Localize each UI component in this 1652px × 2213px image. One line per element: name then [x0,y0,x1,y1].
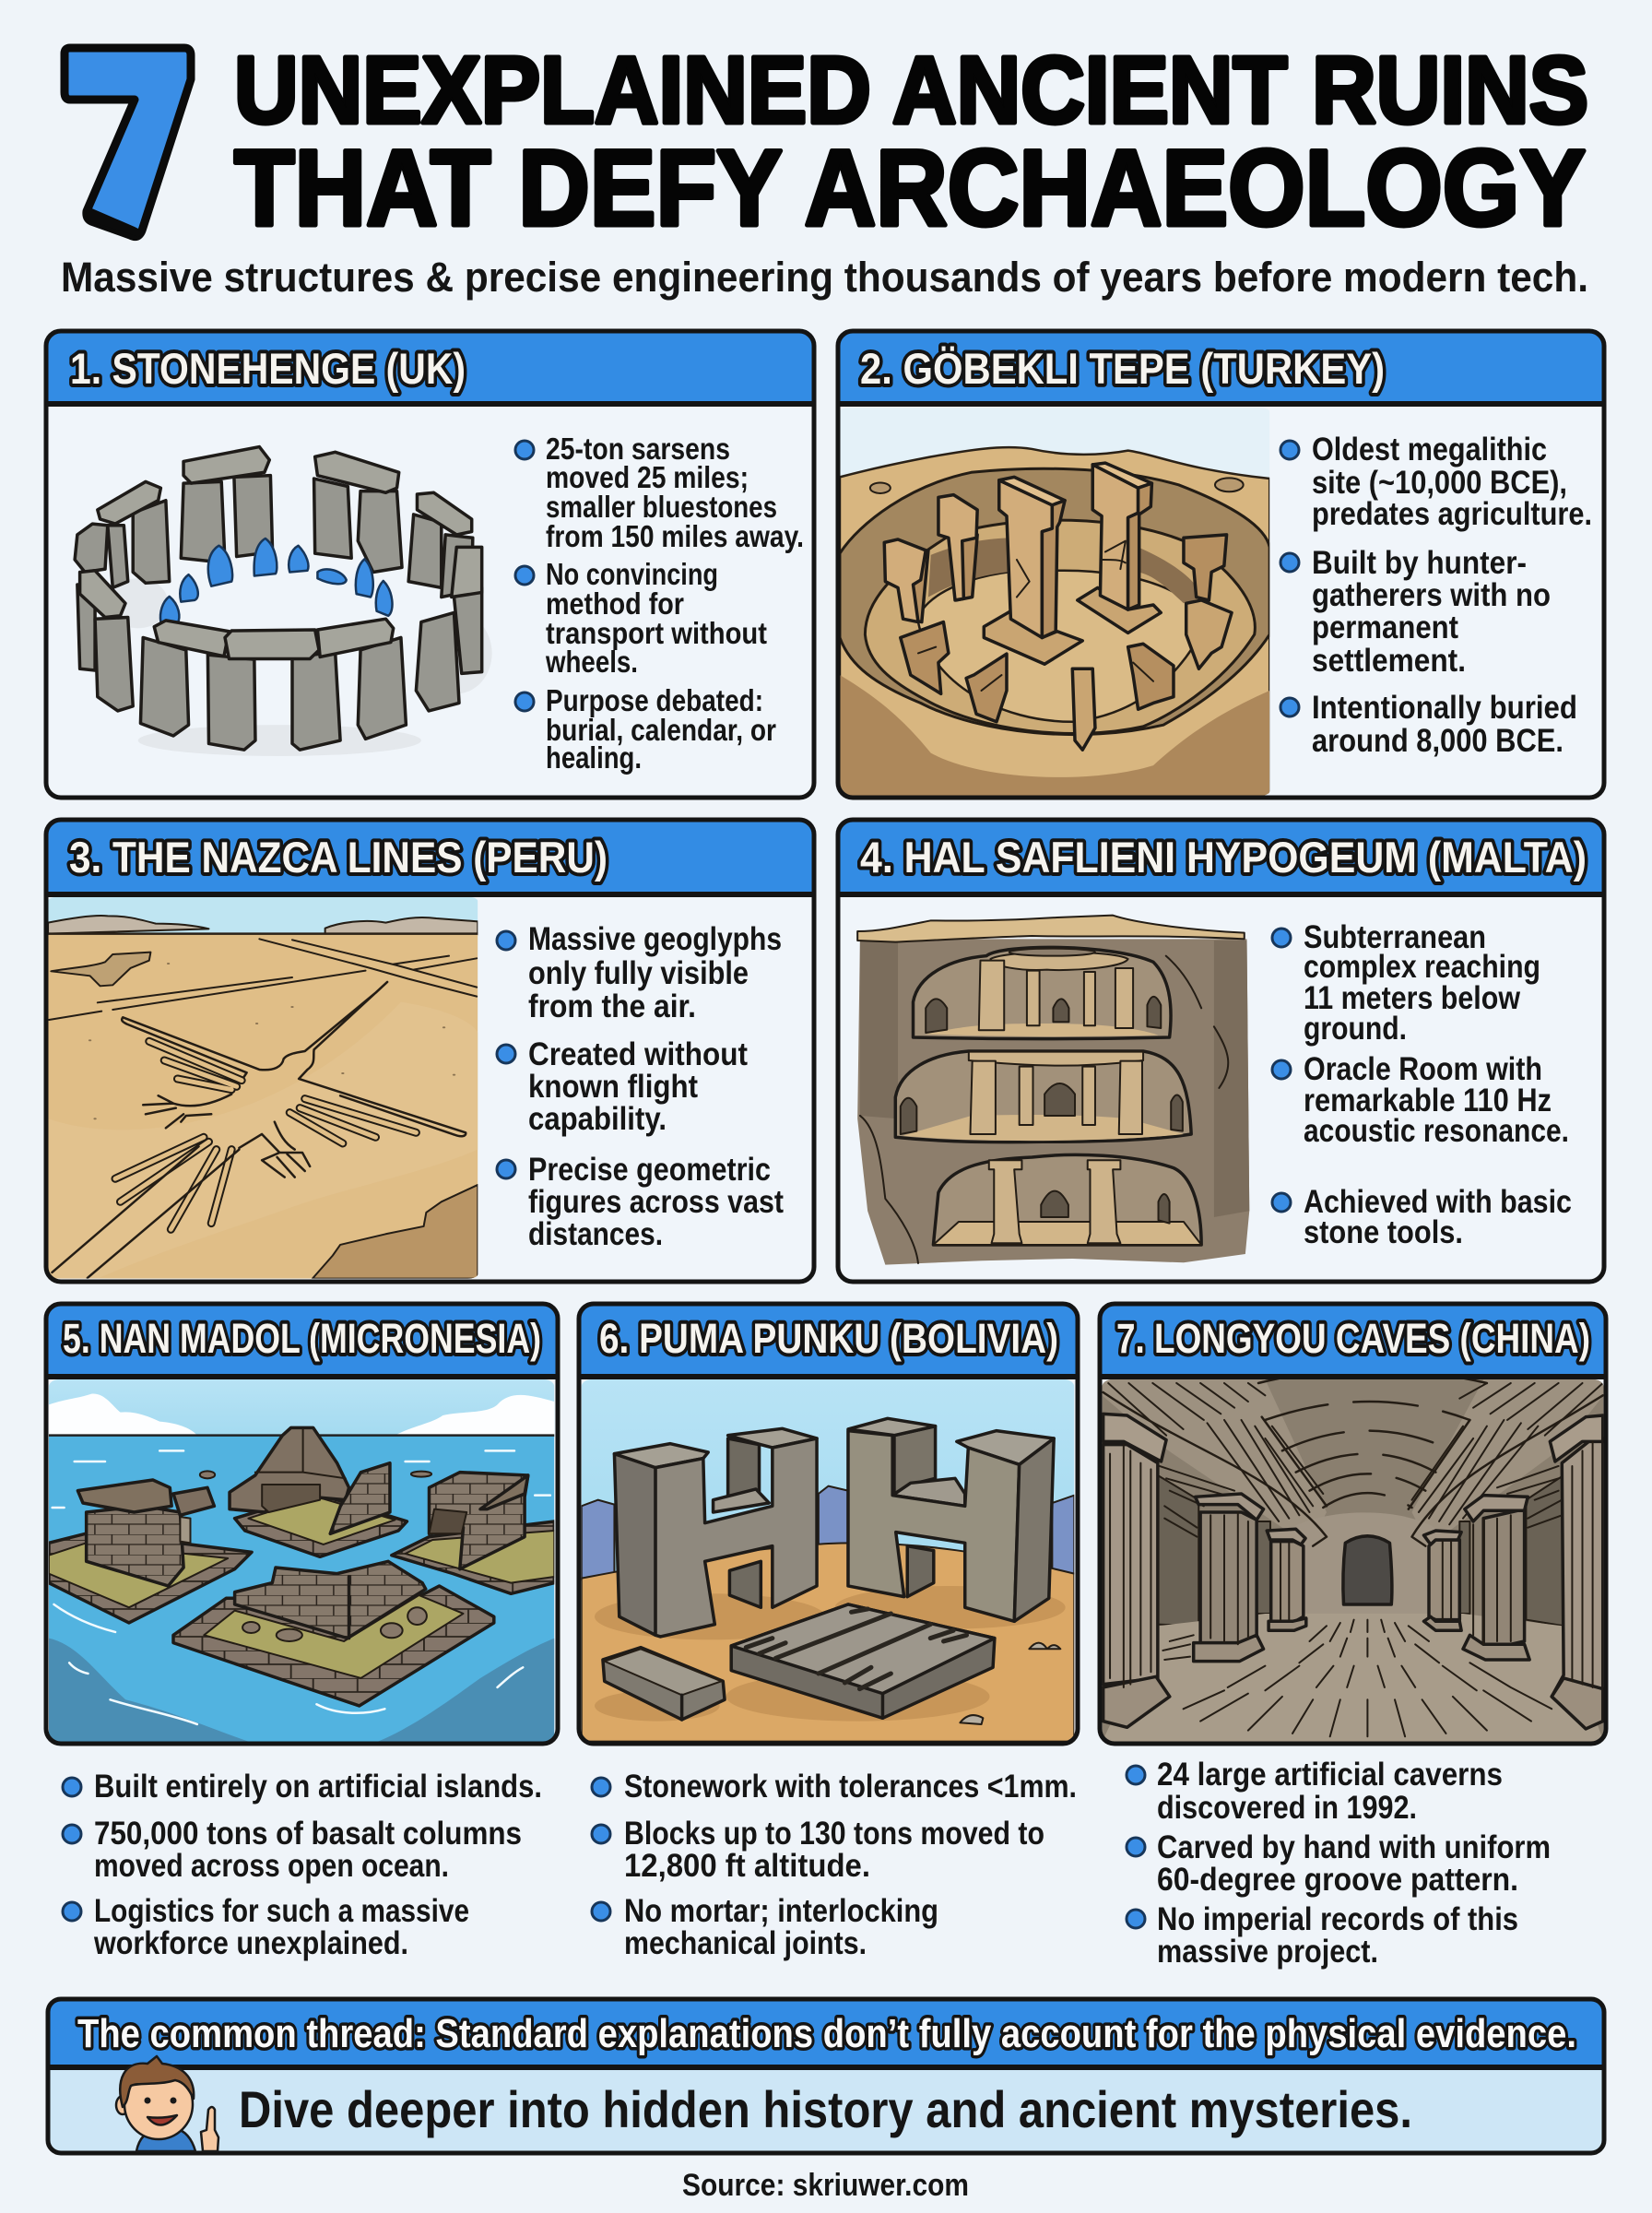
bullet: purpose: burial, calendar, or [546,713,776,747]
banner: common thread and call to action [46,1999,1606,2153]
bullet: sarsens [515,432,804,553]
bullet: sarsens: from 150 miles away. [546,519,804,553]
bullets [497,921,784,1252]
bullet: mortar: No mortar; interlocking [624,1893,938,1929]
bullet: oldest site: site (~10,000 BCE), [1312,465,1567,501]
header bar [836,331,1606,407]
bullet: sarsens: smaller bluestones [546,490,777,524]
bullet: records [1127,1901,1518,1970]
bullet: stone tools: Achieved with basic [1304,1184,1572,1220]
bullet: oracle room [1272,1051,1569,1149]
source credit: Source: skriuwer.com [682,2168,969,2203]
bullet: geoglyphs: from the air. [528,988,696,1024]
block 1 [614,1428,817,1637]
bullet: hunter-gatherers: permanent [1312,609,1458,645]
block 2 [848,1418,1054,1621]
bullet: logistics [63,1893,469,1961]
bullet: groove: Carved by hand with uniform [1157,1829,1551,1865]
illustration: Nan Madol island ruins [49,1379,554,1743]
bullet: logistics: workforce unexplained. [93,1925,408,1961]
header bar [44,1304,560,1379]
bullet: purpose [515,683,776,775]
panel: Puma Punku [577,1304,1080,1744]
header bar [577,1304,1080,1379]
call to action: Dive deeper into hidden history and ancient mysteries. [239,2080,1412,2138]
icon: big blue numeral 7 [65,48,191,237]
panel outline [46,1304,558,1744]
panel outline [46,331,814,798]
panel: Nan Madol [44,1304,560,1744]
bullets [1272,919,1572,1250]
left island [49,1533,252,1623]
bullet: logistics: Logistics for such a massive [94,1893,469,1929]
heading: 6. PUMA PUNKU (BOLIVIA) [599,1315,1058,1362]
panel outline [838,331,1604,798]
bullet: blocks: 12,800 ft altitude. [624,1848,870,1884]
bullet: basalt [63,1816,522,1884]
bullet: flight: capability. [528,1101,667,1137]
illustration: Puma Punku H-blocks [582,1379,1074,1742]
bullet: transport: No convincing [546,557,718,591]
bullet: transport: transport without [546,616,767,650]
bullet: subterranean: 11 meters below [1304,980,1521,1016]
illustration: Stonehenge stone circle [75,447,492,756]
bullet: mortar [592,1893,938,1961]
illustration: hypogeum cross-section [857,916,1249,1265]
bullet: hunter-gatherers: settlement. [1312,643,1466,679]
heading: 5. NAN MADOL (MICRONESIA) [63,1315,541,1362]
bullet: mortar: mechanical joints. [624,1925,867,1961]
panel: Longyou Caves [1098,1304,1608,1744]
bullet: stone tools [1272,1184,1572,1250]
bullet: oracle room: acoustic resonance. [1304,1113,1569,1149]
panel outline [46,820,814,1282]
bullet: hunter-gatherers: Built by hunter- [1312,545,1527,581]
bullet: subterranean: Subterranean [1304,919,1486,955]
bullet: buried: around 8,000 BCE. [1312,723,1564,759]
bullet: geometry: Precise geometric [528,1152,771,1188]
bullet: flight [497,1036,748,1137]
bullet: caverns: 24 large artificial caverns [1157,1757,1503,1793]
bullet: subterranean: complex reaching [1304,949,1540,985]
bullet: artificial islands: Built entirely on artificial islands. [94,1769,542,1805]
bullet: flight: known flight [528,1069,698,1105]
bullet: hunter-gatherers: gatherers with no [1312,577,1551,613]
bullets [515,432,804,775]
bullet: hunter-gatherers [1280,545,1551,679]
panel: Stonehenge [44,331,816,798]
bullet: tolerances: Stonework with tolerances <1mm. [624,1769,1077,1805]
bullet: purpose: healing. [546,740,642,775]
bullet: sarsens: 25-ton sarsens [546,432,730,466]
illustration: Gobekli Tepe excavation pit [840,408,1269,796]
banner outline [48,1999,1604,2153]
bullets [1280,432,1592,759]
banner top band [48,1999,1604,2067]
slab [731,1604,995,1718]
bullet: geoglyphs [497,921,782,1024]
bullet: transport [515,557,767,679]
bullet: geoglyphs: Massive geoglyphs [528,921,782,957]
bullet: blocks: Blocks up to 130 tons moved to [624,1816,1044,1852]
text block: Puma Punku bullets [592,1769,1077,1961]
bullet: geometry [497,1152,784,1252]
bullet: subterranean: ground. [1304,1011,1407,1047]
bullet: caverns: discovered in 1992. [1157,1790,1417,1826]
illustration: Longyou cave interior [1103,1369,1603,1742]
bullet: basalt: 750,000 tons of basalt columns [94,1816,522,1852]
banner bottom band [48,2067,1604,2153]
bullet: records: No imperial records of this [1157,1901,1518,1937]
bullet: oldest site: Oldest megalithic [1312,432,1547,467]
bullet: transport: method for [546,586,684,621]
panel: Hal Saflieni Hypogeum [836,820,1606,1282]
panel: Nazca Lines [44,820,816,1282]
bullet: flight: Created without [528,1036,748,1072]
heading: 4. HAL SAFLIENI HYPOGEUM (MALTA) [860,833,1587,882]
text block: Nan Madol bullets [63,1769,542,1961]
small block [603,1648,725,1720]
title: UNEXPLAINED ANCIENT RUINS [234,37,1588,143]
text block: Longyou Caves bullets [1127,1757,1551,1970]
bullet: oldest site [1280,432,1592,532]
title [234,37,1588,248]
bullet: basalt: moved across open ocean. [94,1848,449,1884]
centre island [235,1494,407,1556]
front island [173,1586,494,1706]
bullet: oracle room: remarkable 110 Hz [1304,1083,1552,1118]
panel: Gobekli Tepe [836,331,1606,798]
header bar [44,331,816,407]
bullet: buried: Intentionally buried [1312,690,1577,726]
bullet: geometry: distances. [528,1216,663,1252]
header bar [44,820,816,897]
bullet: purpose: Purpose debated: [546,683,763,717]
right island [392,1521,554,1593]
columns [1103,1414,1603,1729]
bullet: geoglyphs: only fully visible [528,955,749,991]
bullet: stone tools: stone tools. [1304,1214,1463,1250]
bullet: oldest site: predates agriculture. [1312,496,1592,532]
bullet: groove [1127,1829,1551,1898]
bullet: blocks [592,1816,1044,1884]
bullet: groove: 60-degree groove pattern. [1157,1862,1518,1898]
bullet: buried [1280,690,1577,759]
heading: 2. GÖBEKLI TEPE (TURKEY) [860,344,1385,393]
bullet: sarsens: moved 25 miles; [546,460,749,494]
header bar [1098,1304,1608,1379]
bullet: subterranean [1272,919,1540,1047]
header bar [836,820,1606,897]
panel outline [579,1304,1078,1744]
heading: 3. THE NAZCA LINES (PERU) [69,833,608,882]
bullet: oracle room: Oracle Room with [1304,1051,1542,1087]
icon: pointing boy mascot [116,2056,218,2151]
panel outline [1100,1304,1606,1744]
panel outline [838,820,1604,1282]
illustration: Nazca hummingbird geoglyph [48,897,478,1279]
subtitle: Massive structures & precise engineering thousands of years before modern tech. [61,254,1588,301]
heading: 1. STONEHENGE (UK) [70,344,466,393]
bullet: transport: wheels. [545,645,638,679]
bullet: geometry: figures across vast [528,1184,784,1220]
bullet: records: massive project. [1157,1934,1378,1970]
bullet: caverns [1127,1757,1503,1826]
